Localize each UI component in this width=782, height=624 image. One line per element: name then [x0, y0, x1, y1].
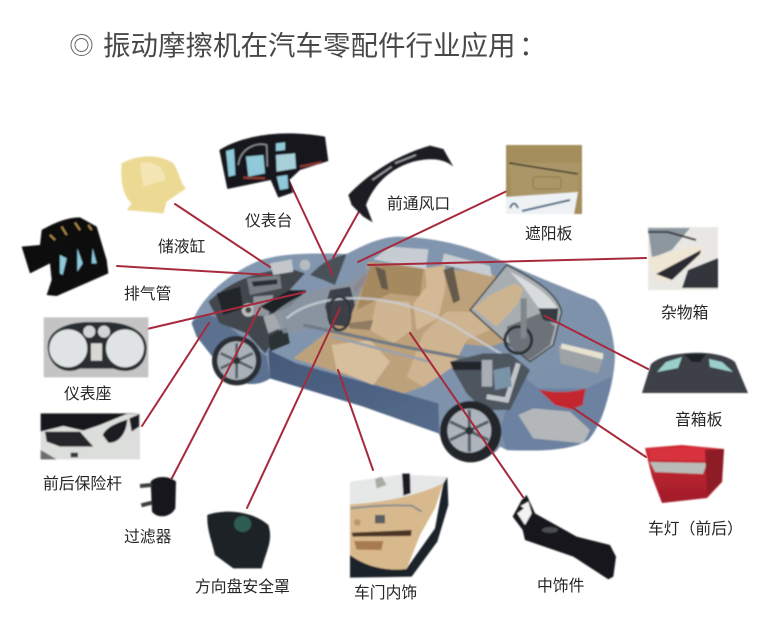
part: storage box photo [648, 227, 718, 290]
part: door trim [350, 474, 448, 578]
interior [293, 262, 523, 393]
label: 车门内饰: 车门内饰 [354, 584, 417, 602]
connector lines [117, 181, 648, 508]
label: 方向盘安全罩: 方向盘安全罩 [195, 577, 290, 596]
dashboard and windscreen [273, 265, 520, 365]
label: 储液缸: 储液缸 [158, 237, 206, 256]
part: steering wheel airbag cover [207, 512, 270, 568]
title: ： [519, 30, 546, 61]
label: 音箱板: 音箱板 [675, 411, 723, 429]
engine bay [208, 259, 310, 353]
car cutaway illustration [192, 237, 615, 462]
label: 过滤器: 过滤器 [124, 528, 172, 546]
part: bumper photo [41, 413, 140, 459]
windows [373, 247, 428, 269]
battery [558, 343, 603, 373]
label: 前通风口: 前通风口 [387, 195, 450, 213]
label: 杂物箱: 杂物箱 [661, 304, 708, 322]
part: sun visor photo [506, 145, 582, 214]
car body [192, 237, 615, 458]
windscreen dark cowl [310, 254, 347, 285]
label: 仪表座: 仪表座 [64, 385, 112, 403]
label: 排气管: 排气管 [124, 285, 171, 303]
front fender [192, 315, 270, 384]
icon: double circle bullet [71, 34, 92, 56]
part: dashboard [219, 133, 328, 198]
label: 仪表台: 仪表台 [245, 212, 292, 230]
rear lower body [500, 377, 612, 451]
rear wheel [440, 401, 501, 462]
lower doors [268, 350, 439, 433]
label: 遮阳板: 遮阳板 [525, 225, 573, 243]
muffler [518, 408, 590, 443]
front wheel [212, 336, 261, 385]
taillight [538, 388, 586, 409]
steering wheel [328, 297, 350, 330]
part: instrument cluster seat photo [44, 317, 148, 377]
label: 车灯（前后）: 车灯（前后） [648, 520, 743, 538]
part: centre console [513, 495, 616, 579]
label: 前后保险杆: 前后保险杆 [43, 475, 122, 493]
part: speaker panel [642, 353, 748, 393]
part: filter [140, 477, 176, 516]
part: tail lamp [645, 445, 724, 503]
label: 中饰件: 中饰件 [537, 577, 585, 595]
rear suspension [450, 353, 530, 410]
trunk cavity [470, 265, 562, 362]
title: 振动摩擦机在汽车零配件行业应用 [103, 30, 516, 61]
part: front vent panel [348, 146, 453, 222]
part: exhaust manifold [22, 217, 108, 296]
part: coolant reservoir [121, 156, 186, 213]
